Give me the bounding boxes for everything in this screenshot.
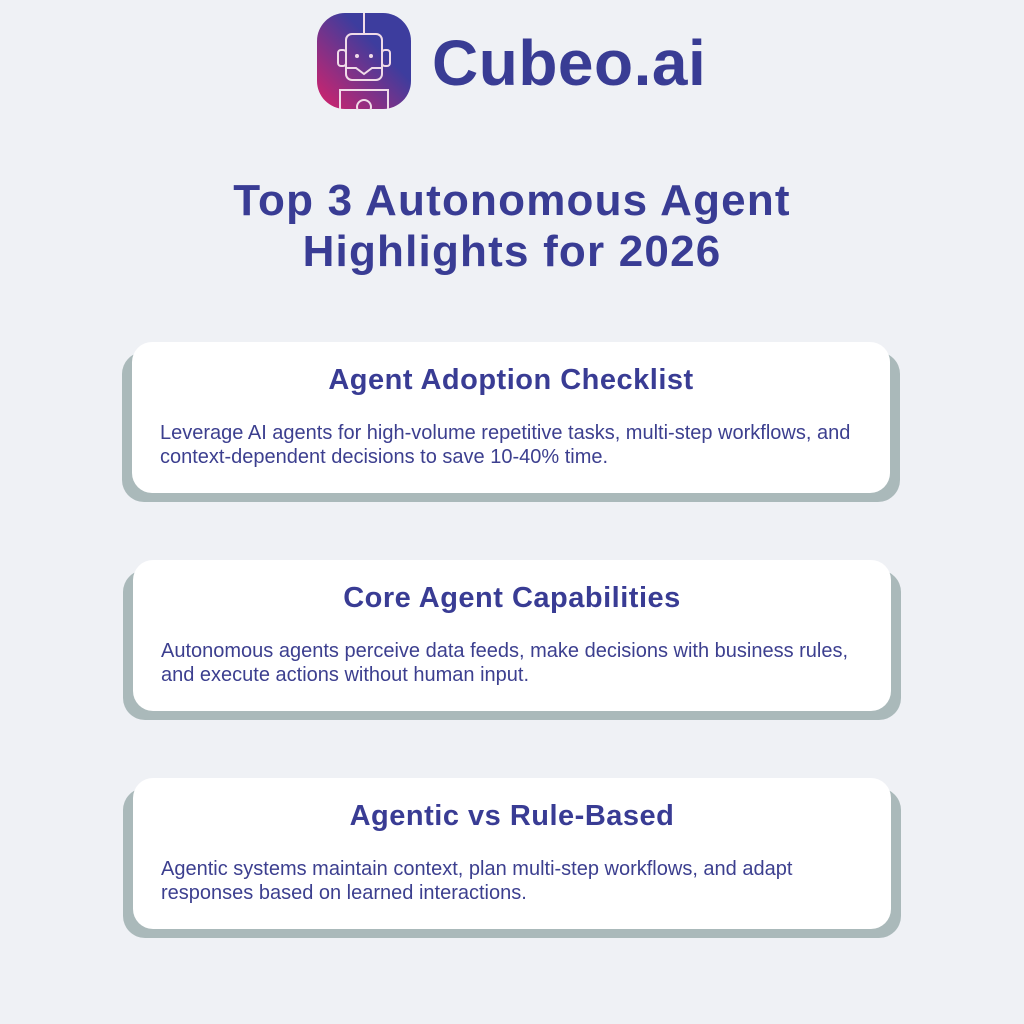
panel: agentic vs rule-based — [123, 778, 901, 938]
icon: robot — [317, 13, 411, 110]
heading: Agent Adoption Checklist — [328, 364, 694, 396]
title: Highlights for 2026 — [303, 227, 721, 276]
brand name: Cubeo.ai — [432, 27, 706, 99]
logo — [317, 13, 706, 110]
panel: agent adoption checklist — [122, 342, 900, 502]
heading: Core Agent Capabilities — [343, 582, 681, 614]
title: Top 3 Autonomous Agent — [233, 176, 791, 225]
heading: Agentic vs Rule-Based — [350, 800, 674, 832]
text block: Leverage AI agents for high-volume repetitive tasks, multi-step workflows, and context-dependent decisions to save 10-40% time. — [160, 422, 850, 468]
title — [233, 176, 791, 276]
text block: Agentic systems maintain context, plan multi-step workflows, and adapt responses based on learned interactions. — [161, 858, 792, 904]
panel: core agent capabilities — [123, 560, 901, 720]
text block: Autonomous agents perceive data feeds, make decisions with business rules, and execute actions without human input. — [161, 640, 848, 686]
